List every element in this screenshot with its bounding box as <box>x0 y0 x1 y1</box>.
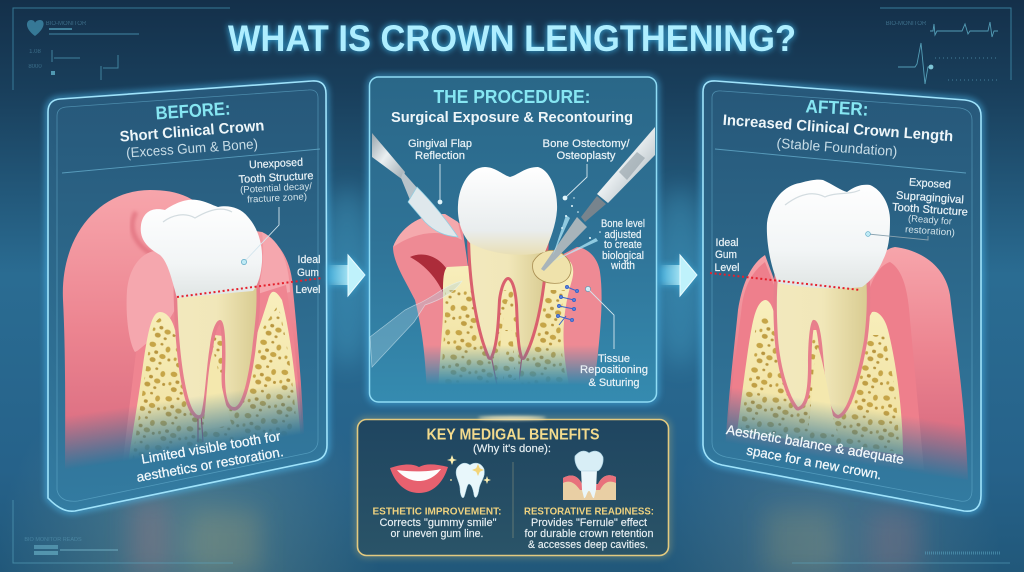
benefit: restorative readiness: for durable crown retention <box>524 528 654 540</box>
callout: bone ostectomy: Bone Ostectomy/ <box>542 138 630 150</box>
tooth crown <box>141 200 262 298</box>
nerve <box>198 412 203 442</box>
callout: gingival flap reflection <box>408 138 472 204</box>
spray particles <box>552 197 601 262</box>
callout: unexposed tooth structure: fracture zone) <box>247 191 307 206</box>
callout: bone level adjusted <box>601 218 645 272</box>
callout: unexposed tooth structure: Unexposed <box>249 157 303 171</box>
middle bone <box>808 347 838 435</box>
exposed bone site <box>533 250 571 283</box>
callout: bone ostectomy: Osteoplasty <box>556 150 616 162</box>
panel: procedure <box>370 77 656 402</box>
callout: exposed supragingival tooth structure: restoration) <box>905 224 955 239</box>
before: heading: (Excess Gum & Bone) <box>126 135 258 161</box>
benefit: restorative readiness: Provides "Ferrule" effect <box>531 517 647 529</box>
arrow: procedure to after <box>660 255 697 296</box>
middle bone <box>203 350 232 430</box>
panel: key medical benefits <box>358 416 668 556</box>
panel frame: before <box>48 81 327 511</box>
textured inner gum lobes <box>127 232 290 352</box>
before: caption: aesthetics or restoration. <box>135 444 285 485</box>
callout: tissue repositioning and suturing: Tissue <box>598 353 630 365</box>
tooth roots <box>177 280 257 415</box>
after: heading: Increased Clinical Crown Length <box>722 112 954 145</box>
icon: dental handpiece and bur <box>541 127 655 271</box>
before: caption: Limited visible tooth for <box>140 428 282 467</box>
after: heading: (Stable Foundation) <box>776 135 898 159</box>
label: ideal gum level: Ideal <box>716 237 738 249</box>
benefit: esthetic improvement: or uneven gum line. <box>390 528 484 540</box>
callout: bone level adjusted: adjusted <box>604 229 642 241</box>
callout: tissue repositioning and suturing <box>580 286 648 389</box>
icon: sparkling tooth <box>447 455 491 498</box>
benefit: restorative readiness: & accesses deep cavities. <box>528 539 648 551</box>
title: WHAT IS CROWN LENGTHENING? <box>228 18 796 59</box>
label: ideal gum level: Gum <box>297 267 319 279</box>
callout: unexposed tooth structure: Tooth Structure <box>238 170 314 186</box>
arrow: before to procedure <box>328 255 365 296</box>
procedure: heading: THE PROCEDURE: <box>434 86 590 107</box>
gum crease beside crown <box>130 210 153 254</box>
label: ideal gum level: Level <box>296 284 320 296</box>
ideal gum level line <box>710 273 860 290</box>
callout: tissue repositioning and suturing: & Suturing <box>588 377 640 389</box>
gum tissue <box>725 247 968 480</box>
nerve <box>491 358 522 383</box>
before: heading <box>119 98 265 161</box>
divider <box>512 462 514 538</box>
alveolar bone with pores <box>737 300 903 455</box>
after: caption: Aesthetic balance & adequate <box>725 422 905 467</box>
callout: unexposed tooth structure: (Potential decay/ <box>240 181 313 196</box>
callout: exposed supragingival tooth structure: Exposed <box>909 177 951 191</box>
label: ideal gum level <box>296 254 320 296</box>
label: ideal gum level: Level <box>714 262 740 274</box>
callout: bone level adjusted: width <box>610 260 635 272</box>
benefit: esthetic improvement <box>372 506 502 540</box>
before: heading: Short Clinical Crown <box>119 117 265 146</box>
procedure: heading: Surgical Exposure & Recontouring <box>391 109 633 126</box>
before: heading: BEFORE: <box>155 98 231 123</box>
callout: bone ostectomy <box>542 138 630 200</box>
gum tissue <box>62 190 304 468</box>
panel: before <box>48 81 327 511</box>
panel frame: benefits <box>358 416 668 556</box>
title: WHAT IS CROWN LENGTHENING? <box>228 18 796 59</box>
background HUD: bottom right readout <box>792 553 1010 563</box>
middle bone <box>500 300 520 383</box>
flap cavity <box>410 254 446 292</box>
label: ideal gum level: Gum <box>715 249 737 261</box>
alveolar bone with pores <box>438 257 573 390</box>
tooth crown <box>767 180 890 288</box>
label: ideal gum level <box>714 237 740 274</box>
background HUD: top right ECG monitor <box>880 8 1011 84</box>
panel frame: after <box>703 81 981 511</box>
background HUD: bottom left readout <box>13 500 233 563</box>
benefits: heading: KEY MEDIGAL BENEFITS <box>426 426 600 444</box>
callout: gingival flap reflection: Reflection <box>415 150 465 162</box>
tooth roots <box>470 232 546 357</box>
callout: unexposed tooth structure <box>238 157 314 265</box>
icon: crown on prepared tooth <box>563 451 616 500</box>
background HUD: top left bio monitor: BIO-MONITOR <box>46 21 87 27</box>
tooth roots <box>777 275 867 415</box>
benefits: heading <box>426 426 600 455</box>
sutures <box>556 286 578 325</box>
background HUD: top left bio monitor: 8000 <box>28 64 42 70</box>
callout: exposed supragingival tooth structure: Supragingival <box>896 190 964 206</box>
benefit: restorative readiness: RESTORATIVE READINESS: <box>524 506 654 518</box>
ideal gum level line <box>177 278 322 297</box>
benefits: heading: (Why it's done): <box>473 443 551 455</box>
alveolar bone with pores <box>126 285 300 456</box>
icon: scalpel <box>372 133 458 237</box>
callout: bone level adjusted: biological <box>602 250 644 262</box>
procedure: tooth cross-section <box>393 214 602 395</box>
background HUD: top left bio monitor: 1.08 <box>29 49 41 55</box>
benefit: restorative readiness <box>524 506 654 551</box>
after: heading <box>722 95 954 159</box>
icon: smile <box>390 464 448 493</box>
panel reflections on floor <box>130 500 920 572</box>
background HUD: bottom left readout: BIO MONITOR READS <box>24 537 82 543</box>
background HUD: top right ECG monitor: BIO-MONITOR <box>886 21 927 27</box>
benefit: esthetic improvement: Corrects "gummy smile" <box>380 517 497 529</box>
gum cut face <box>730 262 922 454</box>
icon: periosteal instrument <box>370 281 462 367</box>
before: gum and tooth illustration <box>62 190 304 468</box>
panel: after <box>703 81 981 511</box>
callout: exposed supragingival tooth structure: Tooth Structure <box>892 201 968 219</box>
panel frame: procedure <box>370 77 656 402</box>
after: caption: space for a new crown. <box>745 443 883 482</box>
label: ideal gum level: Ideal <box>298 254 320 266</box>
callout: bone level adjusted: to create <box>604 239 642 251</box>
callout: bone level adjusted: Bone level <box>601 218 645 230</box>
after: heading: AFTER: <box>805 95 869 120</box>
background HUD: top left bio monitor <box>13 8 230 90</box>
gum tissue <box>393 214 602 395</box>
tooth crown <box>458 167 557 255</box>
callout: exposed supragingival tooth structure <box>866 177 968 240</box>
callout: exposed supragingival tooth structure: (Ready for <box>908 213 952 228</box>
benefit: esthetic improvement: ESTHETIC IMPROVEMENT: <box>372 506 502 518</box>
procedure: heading <box>391 86 633 126</box>
callout: gingival flap reflection: Gingival Flap <box>408 138 472 150</box>
after: gum and tooth illustration <box>725 247 968 480</box>
callout: tissue repositioning and suturing: Repositioning <box>580 364 648 376</box>
